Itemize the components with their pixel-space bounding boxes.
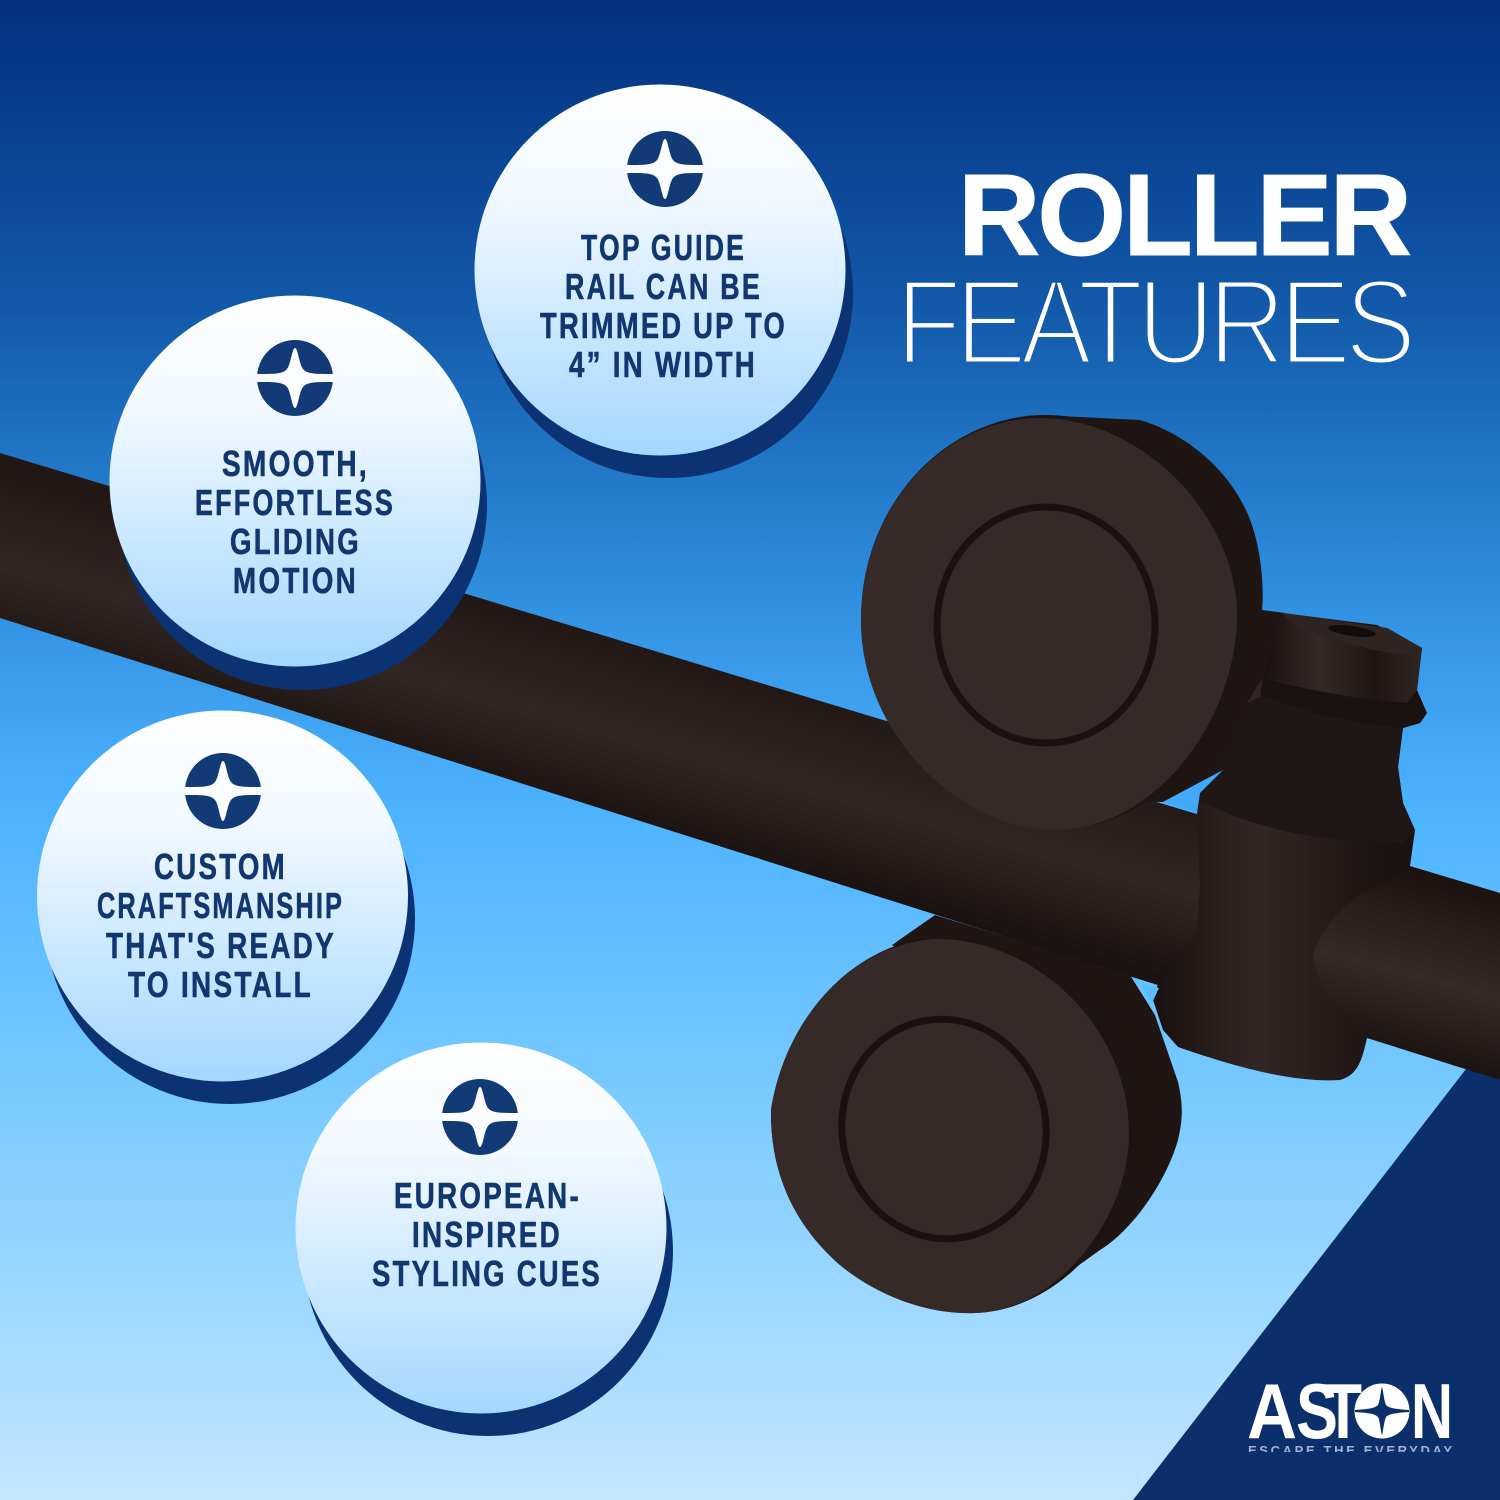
text: european styling [372, 1175, 602, 1294]
title: FEATURES [896, 254, 1411, 390]
bracket collar [1260, 677, 1427, 728]
bracket cap [1263, 613, 1422, 703]
panel: smooth gliding [110, 296, 487, 690]
text: smooth gliding [195, 443, 395, 601]
rail left section [0, 453, 1230, 1008]
icon: star badge [257, 340, 333, 416]
gap lower [1140, 983, 1159, 1003]
panel: european styling [296, 1042, 673, 1436]
upper wheel back [1040, 415, 1290, 802]
logo: T [1324, 1367, 1362, 1455]
icon: star badge [185, 753, 261, 829]
text: smooth gliding: GLIDING [230, 521, 361, 562]
text: european styling: STYLING CUES [372, 1253, 602, 1294]
rail right section [1313, 866, 1500, 1080]
logo: N [1411, 1367, 1453, 1455]
bracket cap top [1283, 613, 1422, 657]
text: custom craftsmanship [97, 846, 344, 1005]
gap upper [1163, 770, 1223, 813]
bracket upper shoulder [1197, 695, 1415, 843]
text: custom craftsmanship: THAT'S READY [106, 925, 336, 966]
icon: star badge [627, 131, 703, 207]
text: smooth gliding: SMOOTH, [222, 443, 369, 484]
bracket hole [1328, 623, 1376, 639]
text: european styling: INSPIRED [412, 1214, 562, 1255]
logo tagline: ESCAPE THE EVERYDAY [1248, 1443, 1452, 1458]
text: smooth gliding: EFFORTLESS [195, 482, 395, 523]
text: top guide rail: TRIMMED UP TO [540, 305, 787, 346]
panel: custom craftsmanship [37, 710, 415, 1104]
text: top guide rail [540, 227, 787, 385]
text: top guide rail: RAIL CAN BE [565, 266, 762, 307]
lower wheel inner ring [824, 1003, 1064, 1255]
text: european styling: EUROPEAN- [394, 1175, 581, 1216]
logo: S [1296, 1367, 1338, 1455]
title: ROLLER [958, 150, 1410, 280]
logo [1247, 1367, 1453, 1458]
text: top guide rail: 4” IN WIDTH [569, 344, 757, 385]
lower wheel face [771, 939, 1129, 1313]
icon: star badge [442, 1079, 518, 1155]
corner triangle [1133, 1025, 1500, 1500]
title [896, 150, 1411, 390]
text: custom craftsmanship: CUSTOM [154, 846, 287, 887]
logo star O [1354, 1384, 1410, 1438]
text: top guide rail: TOP GUIDE [581, 227, 746, 268]
text: custom craftsmanship: CRAFTSMANSHIP [97, 885, 344, 926]
logo: A [1247, 1367, 1297, 1455]
text: custom craftsmanship: TO INSTALL [128, 964, 313, 1005]
bracket body [1153, 613, 1427, 1080]
roller hardware illustration [0, 415, 1500, 1313]
lower wheel rim [771, 937, 1138, 1313]
upper wheel rim [861, 415, 1248, 830]
panel: top guide rail [474, 84, 853, 478]
upper wheel inner ring [937, 507, 1155, 743]
lower wheel back [892, 915, 1182, 1268]
text: smooth gliding: MOTION [233, 560, 358, 601]
upper wheel face [861, 418, 1237, 830]
